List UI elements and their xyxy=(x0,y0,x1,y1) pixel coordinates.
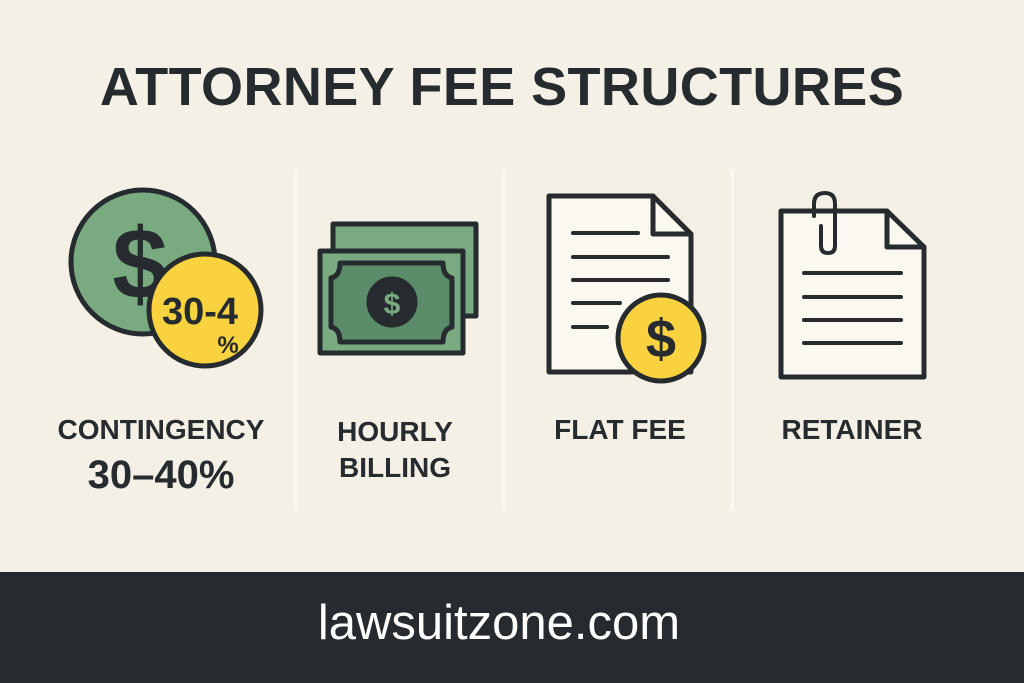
footer text: lawsuitzone.com xyxy=(318,596,680,650)
label: hourly billing xyxy=(337,416,453,483)
label: contingency: 30–40% xyxy=(88,453,234,497)
label: hourly billing: HOURLY xyxy=(337,416,453,447)
label: contingency xyxy=(58,414,264,497)
icon: contingency coins: % xyxy=(217,332,239,359)
icon: hourly bills: $ xyxy=(384,288,401,321)
label: retainer: RETAINER xyxy=(781,414,923,445)
icon: flat fee document xyxy=(549,196,704,381)
icon: hourly bills xyxy=(320,224,476,353)
icon: contingency coins: 30-4 xyxy=(162,291,238,333)
icon: contingency coins xyxy=(71,190,261,366)
title: ATTORNEY FEE STRUCTURES xyxy=(100,57,904,117)
footer xyxy=(0,572,1024,683)
icon: flat fee document: $ xyxy=(646,309,676,369)
label: hourly billing: BILLING xyxy=(339,452,451,483)
label: flat fee: FLAT FEE xyxy=(554,414,686,445)
icon: retainer document xyxy=(781,193,924,377)
label: contingency: CONTINGENCY xyxy=(58,414,264,445)
icon: contingency coins: $ xyxy=(112,208,168,320)
